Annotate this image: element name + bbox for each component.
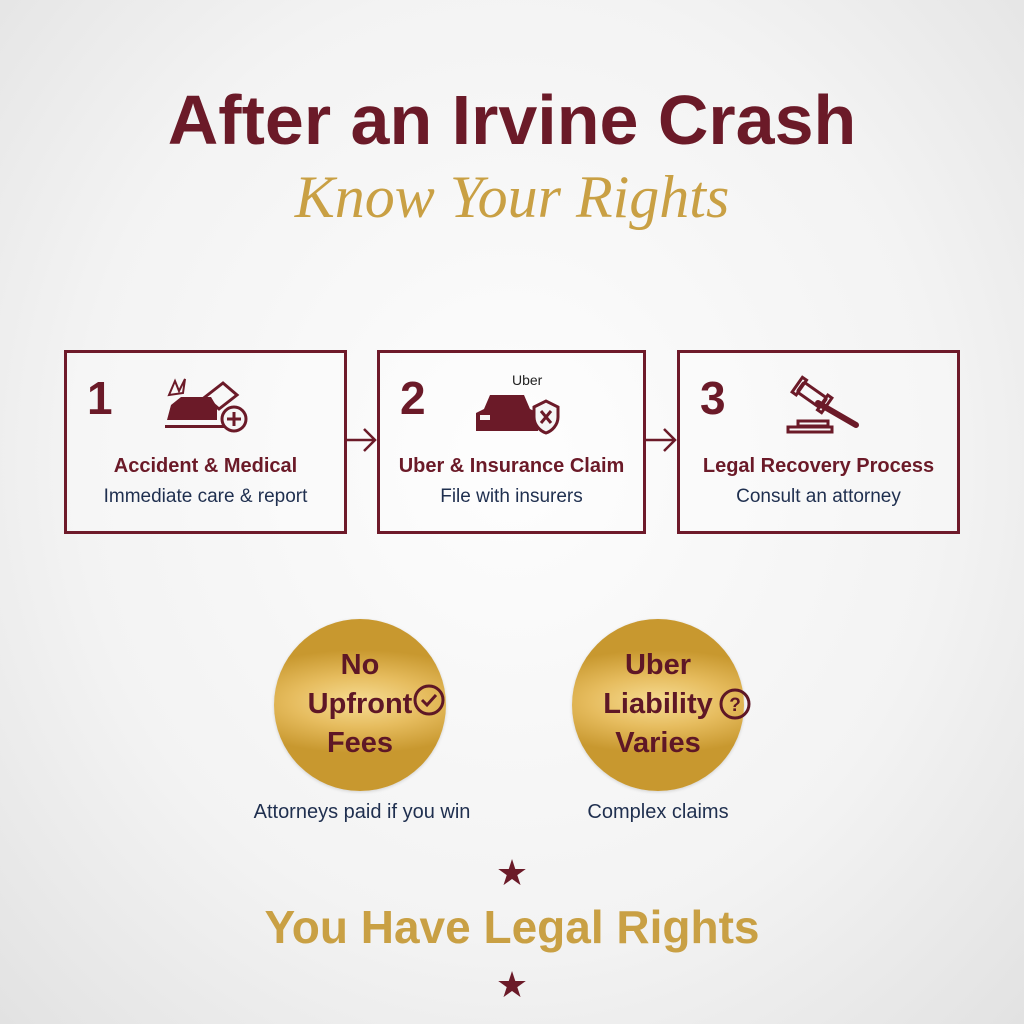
icon: car with shield: Uber: [512, 372, 543, 388]
heading: Accident & Medical: [114, 455, 297, 477]
icon: question: [720, 688, 750, 720]
text: Immediate care & report: [104, 486, 307, 507]
number 3: 3: [700, 372, 726, 424]
number 1: 1: [87, 372, 113, 424]
panel: step 2: [377, 350, 646, 534]
star bottom: ★: [496, 964, 528, 1005]
text: Consult an attorney: [736, 486, 901, 507]
heading: Legal Recovery Process: [703, 455, 934, 477]
badge: no upfront fees: [274, 619, 446, 791]
arrow 2: [646, 428, 677, 452]
title: After an Irvine Crash: [168, 81, 856, 159]
closing statement: You Have Legal Rights: [264, 901, 760, 953]
icon: question: ?: [729, 695, 741, 716]
badge: uber liability varies: Liability: [603, 688, 713, 720]
number 2: 2: [400, 372, 426, 424]
caption 2: Complex claims: [587, 801, 729, 823]
heading: Uber & Insurance Claim: [399, 455, 624, 477]
badge: uber liability varies: Uber: [625, 649, 691, 681]
star top: ★: [496, 852, 528, 893]
badge: uber liability varies: [572, 619, 744, 791]
badge: no upfront fees: No: [341, 649, 379, 681]
icon: crashed car with medical cross: [165, 378, 248, 432]
subtitle: Know Your Rights: [295, 164, 729, 230]
badge: no upfront fees: Fees: [327, 727, 393, 759]
icon: gavel: [786, 375, 859, 434]
icon: car with shield: [476, 372, 560, 435]
arrow 1: [347, 428, 377, 452]
panel: step 3: [677, 350, 960, 534]
caption 1: Attorneys paid if you win: [254, 801, 470, 823]
text: File with insurers: [440, 486, 583, 507]
badge: uber liability varies: Varies: [615, 727, 701, 759]
panel: step 1: [64, 350, 347, 534]
badge: no upfront fees: Upfront: [308, 688, 412, 720]
icon: check: [414, 684, 444, 716]
